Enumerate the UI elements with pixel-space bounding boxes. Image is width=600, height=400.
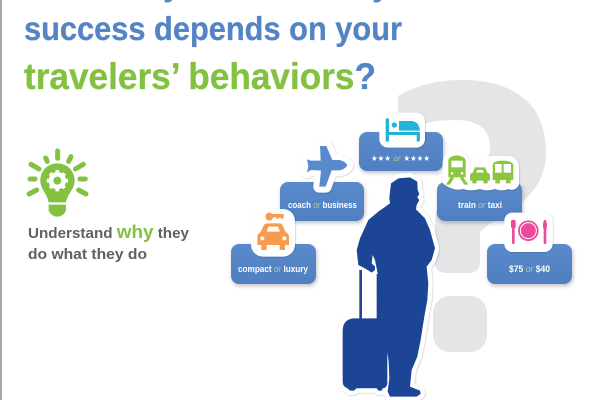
text: understand why: Understand why they [28,222,189,242]
icon: bed [379,113,425,148]
card: stars [359,132,443,171]
icon: light bulb with gear [29,151,86,217]
card: compact or luxury: compact or luxury [238,264,308,274]
icon: train, taxi and bus [443,150,519,190]
text: understand why [28,222,189,263]
background question mark [398,80,546,352]
icon: plate with fork and knife [504,213,553,252]
title [24,0,441,97]
icon: airplane [307,146,347,187]
card: train or taxi: train or taxi [458,200,502,210]
card: train or taxi [437,182,522,221]
card: stars: ★★★ or ★★★★ [371,154,430,163]
title: travelers’ behaviors? [24,56,376,97]
card: compact or luxury [231,244,316,284]
card: price: $75 or $40 [509,264,550,275]
card: price [487,244,572,284]
traveler silhouette with suitcase [343,177,435,397]
card: coach or business [280,182,364,221]
text: understand why: do what they do [28,247,147,263]
card: coach or business: coach or business [288,200,357,210]
icon: car with key [251,209,295,257]
title: success depends on your [24,10,402,47]
